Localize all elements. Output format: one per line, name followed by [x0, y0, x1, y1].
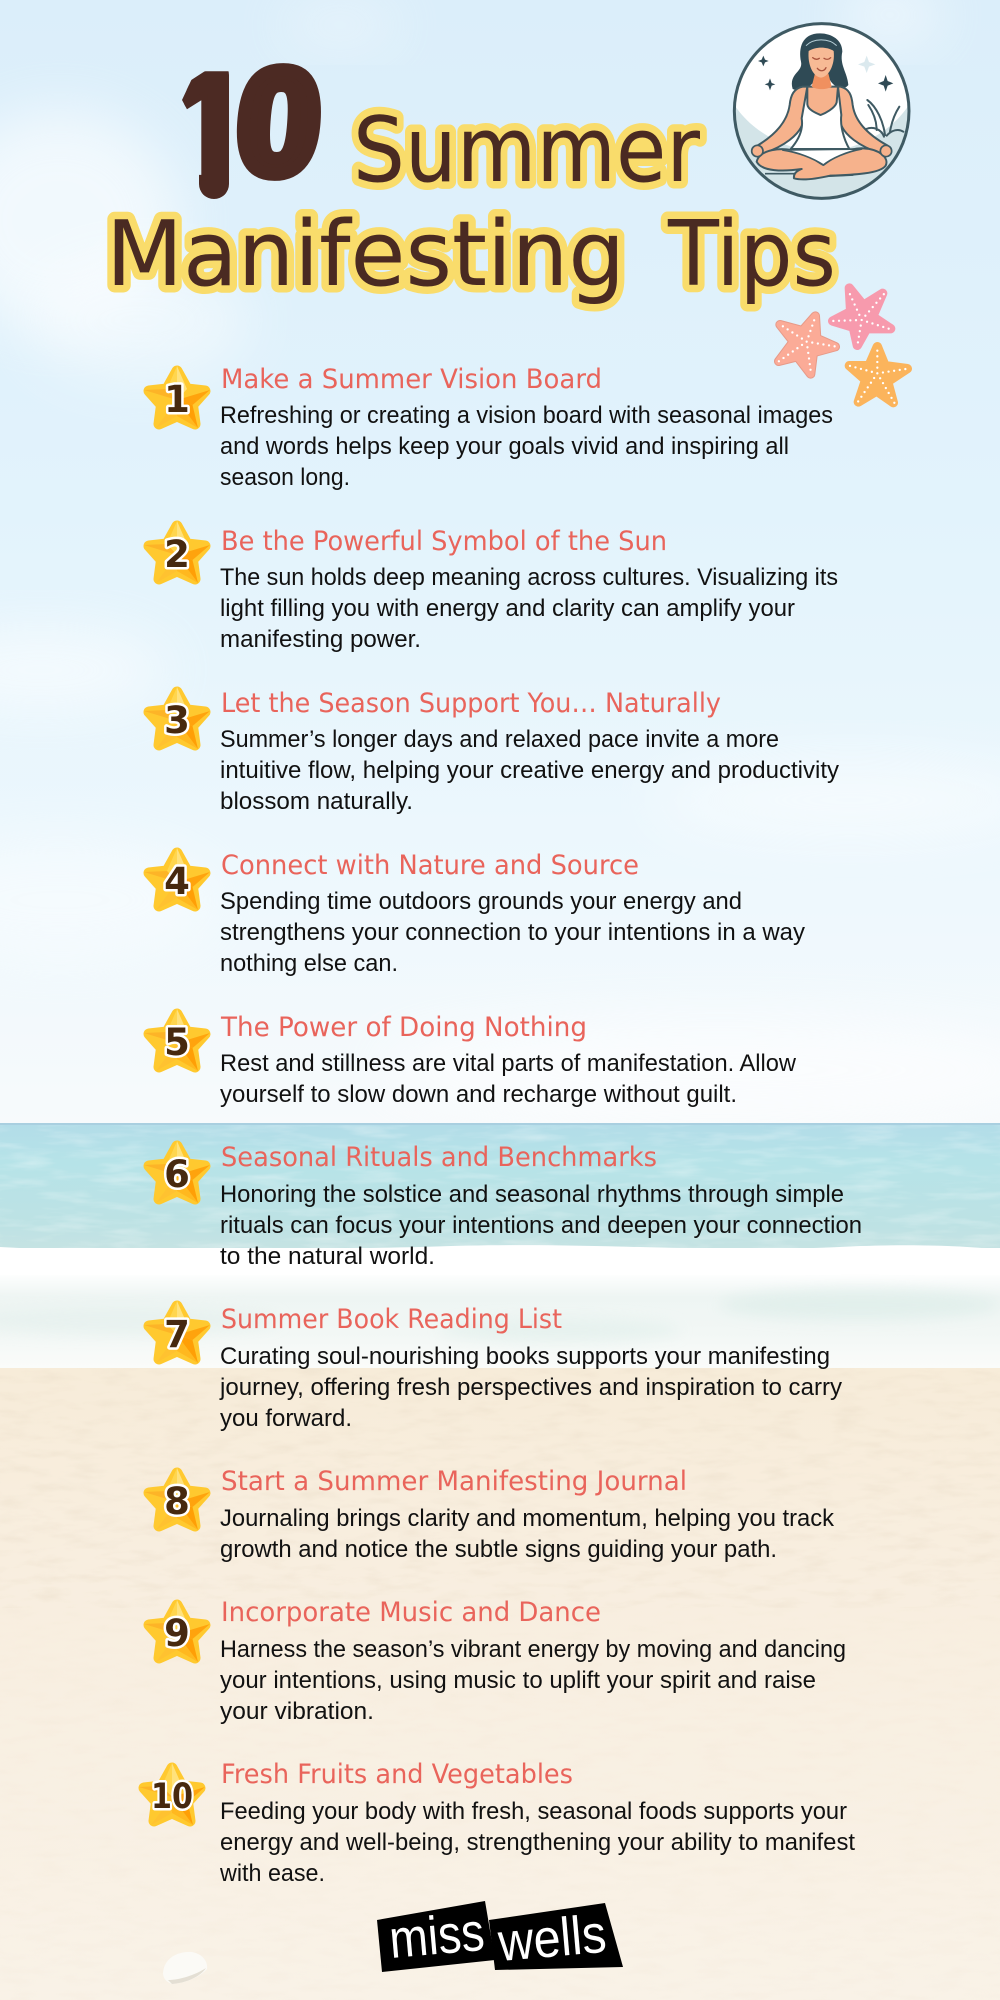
heading: Be the Powerful Symbol of the Sun [221, 526, 667, 557]
salmon starfish [777, 315, 837, 375]
body text: and words helps keep your goals vivid and inspiring all [220, 433, 789, 460]
icon: star number 1 [144, 366, 210, 428]
icon: star number 3 [144, 687, 210, 749]
body text [219, 1343, 842, 1432]
icon: star number 1: 1 [164, 378, 190, 421]
body text: your intentions, using music to uplift your spirit and raise [220, 1667, 816, 1694]
body text: Journaling brings clarity and momentum, helping you track [220, 1505, 835, 1532]
icon: three starfish [777, 288, 908, 403]
icon: star number 8 [144, 1468, 210, 1530]
tip 4 [144, 848, 805, 977]
tip 3 [144, 687, 839, 815]
icon: star number 5: 5 [164, 1021, 190, 1064]
tip 8 [144, 1466, 835, 1563]
heading: Incorporate Music and Dance [221, 1597, 601, 1628]
icon: plant [864, 100, 903, 137]
body text: Feeding your body with fresh, seasonal foods supports your [220, 1798, 847, 1825]
title number 10 [182, 63, 321, 199]
body text: intuitive flow, helping your creative energy and productivity [220, 757, 839, 784]
body text: Spending time outdoors grounds your energy and [220, 888, 742, 915]
logo: miss wells: miss [387, 1902, 487, 1970]
logo: miss wells: wells [495, 1904, 609, 1973]
heading: Summer Book Reading List [221, 1304, 562, 1335]
title line Manifesting Tips: Tips [667, 202, 836, 307]
body text [220, 888, 805, 977]
body text: Curating soul-nourishing books supports your manifesting [220, 1343, 830, 1370]
hair [792, 33, 848, 90]
icon: star number 4: 4 [164, 860, 190, 903]
heading: Fresh Fruits and Vegetables [221, 1759, 573, 1790]
white top [791, 87, 849, 149]
icon: star number 3: 3 [164, 699, 190, 742]
icon: star number 9 [144, 1600, 210, 1662]
hands [752, 145, 763, 157]
body text: light filling you with energy and clarity can amplify your [220, 595, 795, 622]
icon: star number 7: 7 [164, 1313, 190, 1356]
icon: star number 10: 10 [151, 1777, 193, 1817]
body text: growth and notice the subtle signs guiding your path. [220, 1536, 777, 1563]
tip 5 [144, 1009, 797, 1108]
body text [220, 1050, 797, 1108]
body text: your vibration. [220, 1698, 374, 1725]
body text [220, 1505, 835, 1563]
neck [812, 73, 832, 89]
heading: Start a Summer Manifesting Journal [221, 1466, 687, 1497]
body text: Harness the season’s vibrant energy by moving and dancing [220, 1636, 846, 1663]
crossed legs [757, 148, 886, 179]
body text [220, 726, 839, 815]
body text: strengthens your connection to your intentions in a way [220, 919, 805, 946]
icon: star number 6 [144, 1141, 210, 1203]
title [106, 36, 836, 307]
title number 10: 1 [163, 36, 261, 234]
body text: with ease. [219, 1860, 325, 1887]
icon: star number 2: 2 [164, 533, 190, 576]
tip 6 [144, 1141, 862, 1270]
tip 10 [139, 1759, 855, 1887]
body text: manifesting power. [220, 626, 421, 653]
icon: star number 4 [144, 848, 210, 910]
body text [220, 1181, 862, 1270]
body [757, 87, 888, 153]
logo: miss wells [377, 1901, 623, 1973]
tip 1 [144, 364, 833, 491]
icon: star number 7 [144, 1301, 210, 1363]
heading: Make a Summer Vision Board [221, 364, 602, 395]
icon: star number 9: 9 [164, 1612, 190, 1655]
body text [220, 1636, 846, 1725]
heading: Let the Season Support You… Naturally [221, 688, 721, 719]
icon: star number 10 [139, 1763, 205, 1825]
body text [220, 564, 838, 653]
pink starfish [832, 288, 891, 346]
body text: rituals can focus your intentions and deepen your connection [220, 1212, 862, 1239]
tip 2 [144, 521, 838, 653]
body text: Rest and stillness are vital parts of manifestation. Allow [220, 1050, 797, 1077]
body text: journey, offering fresh perspectives and inspiration to carry [219, 1374, 842, 1401]
title number 10: 0 [232, 40, 326, 205]
icon: star number 8: 8 [164, 1480, 190, 1523]
body text [220, 402, 833, 491]
body text: nothing else can. [220, 950, 398, 977]
body text [219, 1798, 855, 1887]
title line Manifesting Tips: Manifesting [106, 202, 625, 307]
body text: Refreshing or creating a vision board with seasonal images [220, 402, 833, 429]
body text: Honoring the solstice and seasonal rhythms through simple [220, 1181, 844, 1208]
body text: you forward. [220, 1405, 352, 1432]
heading: The Power of Doing Nothing [220, 1012, 587, 1043]
orange starfish [848, 346, 908, 403]
body text: yourself to slow down and recharge without guilt. [220, 1081, 737, 1108]
heading: Connect with Nature and Source [221, 850, 639, 881]
body text: blossom naturally. [220, 788, 413, 815]
face [808, 48, 834, 78]
body text: energy and well-being, strengthening your ability to manifest [220, 1829, 855, 1856]
icon: sparkles [758, 56, 893, 92]
body text: Summer’s longer days and relaxed pace invite a more [220, 726, 779, 753]
title word Summer: Summer [353, 98, 700, 203]
tip 9 [144, 1597, 846, 1725]
icon: star number 5 [144, 1009, 210, 1071]
icon: star number 6: 6 [164, 1153, 190, 1196]
icon: meditating woman medallion [733, 24, 910, 202]
body text: to the natural world. [220, 1243, 435, 1270]
icon: star number 2 [144, 521, 210, 583]
heading: Seasonal Rituals and Benchmarks [221, 1142, 657, 1173]
body text: season long. [220, 464, 350, 491]
tip 7 [144, 1301, 842, 1432]
icon: seashell [163, 1952, 207, 1984]
body text: The sun holds deep meaning across cultures. Visualizing its [220, 564, 838, 591]
